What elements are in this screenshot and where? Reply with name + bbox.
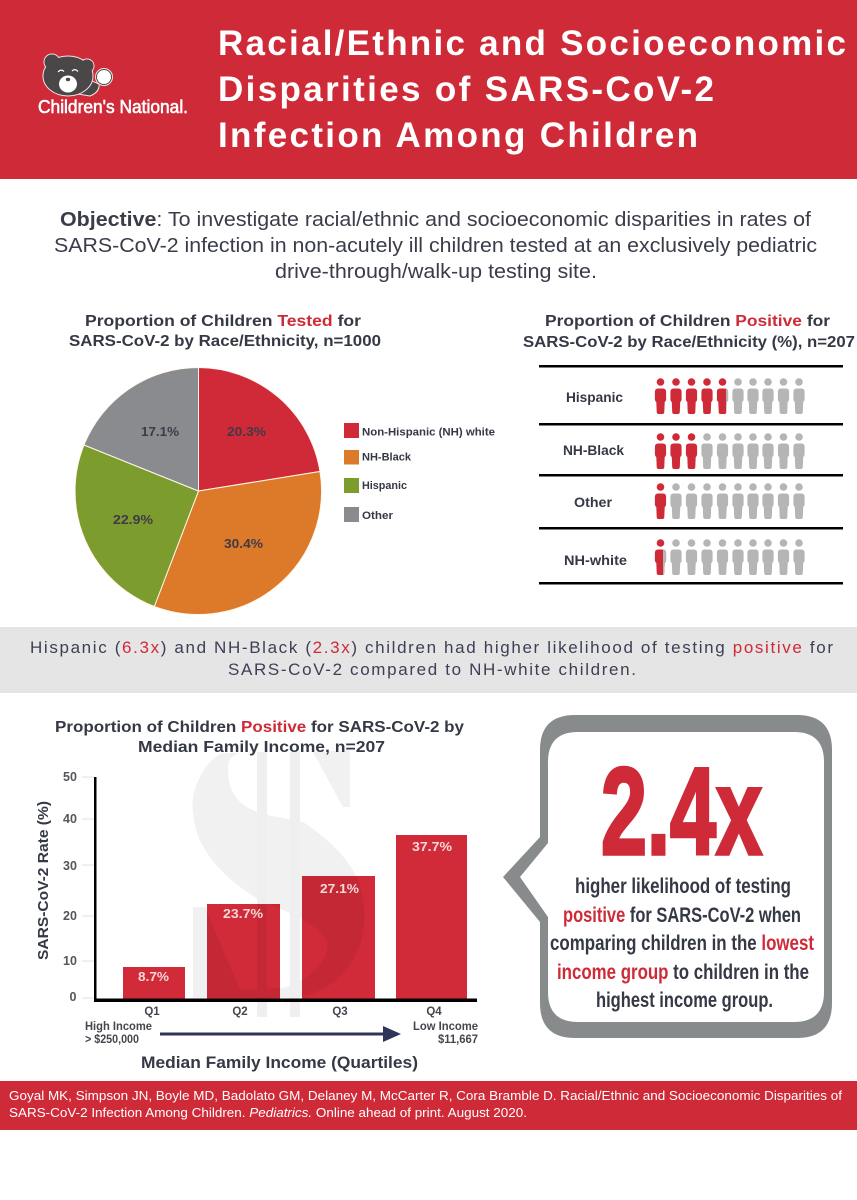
objective text <box>54 208 817 283</box>
big statistic: 2.4x <box>601 744 762 881</box>
y axis tick labels: 0 <box>70 990 77 1004</box>
callout band: racial disparity finding: SARS-CoV-2 compared to NH-white children. <box>228 660 636 679</box>
high income label: > $250,000 <box>85 1034 139 1046</box>
pie chart heading <box>69 313 381 350</box>
objective text: SARS-CoV-2 infection in non-acutely ill children tested at an exclusively pediatric <box>54 234 817 257</box>
citation footer <box>0 1081 857 1130</box>
x axis title: Median Family Income (Quartiles) <box>141 1054 418 1072</box>
pictogram heading: SARS-CoV-2 by Race/Ethnicity (%), n=207 <box>523 334 855 351</box>
panel: pie chart of children tested <box>69 313 495 615</box>
quartile labels: Q1 <box>144 1006 160 1018</box>
citation footer: Goyal MK, Simpson JN, Boyle MD, Badolato GM, Delaney M, McCarter R, Cora Bramble D. Racial/Ethnic and Socioeconomic Disparities of <box>9 1088 842 1103</box>
panel: income bar chart <box>35 719 478 1072</box>
row: Other <box>574 483 805 519</box>
pie labels: 20.3% <box>227 424 266 439</box>
row: Hispanic: Hispanic <box>566 389 623 405</box>
y axis tick labels <box>63 770 77 1004</box>
callout text: comparing children in the lowest <box>550 932 814 955</box>
pie legend: Other <box>362 510 394 522</box>
y axis title: SARS-CoV-2 Rate (%) <box>35 801 52 960</box>
bar chart heading: Proportion of Children Positive for SARS-CoV-2 by <box>55 719 464 736</box>
quartile labels: Q3 <box>332 1006 348 1018</box>
title <box>218 24 846 155</box>
callout band: racial disparity finding <box>0 627 857 693</box>
bar chart heading: Median Family Income, n=207 <box>138 739 385 756</box>
pie chart <box>75 368 322 615</box>
pie labels: 22.9% <box>113 512 153 527</box>
bar value labels <box>138 839 452 984</box>
header banner <box>0 0 857 179</box>
panel: pictogram of children positive <box>523 313 855 584</box>
y axis tick labels: 20 <box>63 909 77 923</box>
row: NH-white: NH-white <box>564 552 627 568</box>
row: NH-Black: NH-Black <box>563 442 624 458</box>
bar value labels: 37.7% <box>412 839 452 854</box>
row: Hispanic <box>566 378 805 414</box>
bar value labels: 8.7% <box>138 969 169 984</box>
title: Disparities of SARS-CoV-2 <box>218 70 714 109</box>
pictogram heading: Proportion of Children Positive for <box>545 313 830 330</box>
low income label <box>413 1021 478 1046</box>
pie labels <box>113 424 266 551</box>
low income label: $11,667 <box>438 1034 478 1046</box>
low income label: Low Income <box>413 1021 478 1033</box>
title: Racial/Ethnic and Socioeconomic <box>218 24 846 63</box>
quartile labels: Q4 <box>426 1006 442 1018</box>
chart axes <box>94 777 477 1002</box>
pie legend <box>344 423 495 522</box>
pie legend: Hispanic <box>362 480 407 492</box>
row: Other: Other <box>574 494 613 510</box>
pie chart heading: Proportion of Children Tested for <box>85 313 361 330</box>
bar chart heading <box>55 719 464 756</box>
callout band: racial disparity finding: Hispanic (6.3x) and NH-Black (2.3x) children had higher likelihood of testing positive for <box>30 638 833 657</box>
y axis tick labels: 50 <box>63 770 77 784</box>
pictogram heading <box>523 313 855 351</box>
dollar sign watermark <box>192 750 364 1017</box>
objective text: Objective: To investigate racial/ethnic and socioeconomic disparities in rates of <box>60 208 811 231</box>
callout text: positive for SARS-CoV-2 when <box>563 904 801 927</box>
row: NH-Black <box>563 433 805 469</box>
citation footer: SARS-CoV-2 Infection Among Children. Pediatrics. Online ahead of print. August 2020. <box>9 1105 527 1120</box>
callout text: higher likelihood of testing <box>575 875 791 898</box>
callout: 2.4x income disparity <box>503 715 832 1038</box>
bar value labels: 27.1% <box>320 881 359 896</box>
high income label: High Income <box>85 1021 152 1033</box>
y axis tick labels: 10 <box>63 954 77 968</box>
high income label <box>85 1021 152 1046</box>
arrow: income direction <box>160 1026 401 1042</box>
pie chart heading: SARS-CoV-2 by Race/Ethnicity, n=1000 <box>69 333 381 350</box>
title: Infection Among Children <box>218 116 698 155</box>
callout text: highest income group. <box>596 989 773 1012</box>
pie labels: 17.1% <box>141 424 179 439</box>
y axis tick labels: 40 <box>63 812 77 826</box>
bars <box>123 835 467 1000</box>
objective text: drive-through/walk-up testing site. <box>275 260 597 283</box>
quartile labels: Q2 <box>232 1006 248 1018</box>
callout text <box>550 875 814 1012</box>
logo: Children's National bear <box>38 54 188 117</box>
y axis tick labels: 30 <box>63 859 77 873</box>
speech bubble <box>503 715 832 1038</box>
quartile labels <box>144 1006 442 1018</box>
bar value labels: 23.7% <box>223 906 263 921</box>
pie legend: Non-Hispanic (NH) white <box>362 426 495 438</box>
row: NH-white <box>564 539 805 575</box>
pie legend: NH-Black <box>362 452 412 464</box>
callout text: income group to children in the <box>557 961 809 984</box>
pie labels: 30.4% <box>224 536 263 551</box>
logo wordmark: Children's National. <box>38 97 188 117</box>
